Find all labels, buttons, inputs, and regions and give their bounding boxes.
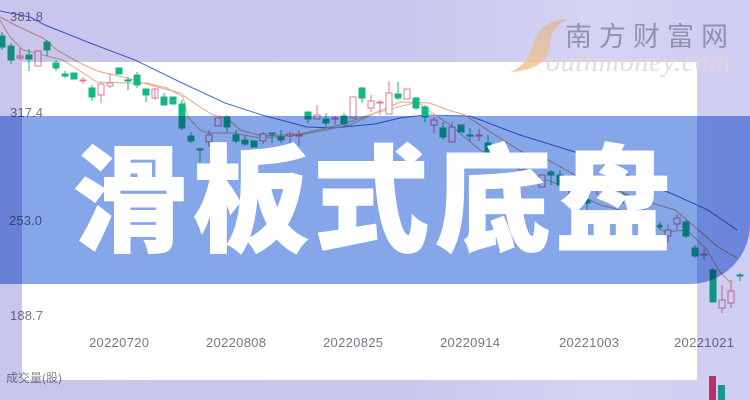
axis labels: dates: 20221021 xyxy=(674,335,734,350)
axis labels: dates: 20220720 xyxy=(89,335,149,350)
candlesticks: rising (pink hollow) xyxy=(17,48,734,313)
blue title band xyxy=(0,116,750,284)
logo: south money swoosh xyxy=(510,19,569,72)
title: 滑板式底盘 xyxy=(72,108,671,276)
candlesticks: falling (green) xyxy=(0,32,743,302)
volume bar: rising xyxy=(709,376,716,400)
line: medium moving average xyxy=(0,17,737,258)
line: long moving average xyxy=(0,11,737,230)
volume axis label: 成交量(股) xyxy=(6,370,62,385)
logo: chinese site name: 南方财富网 xyxy=(565,15,728,54)
axis labels: dates: 20221003 xyxy=(559,335,619,350)
volume bars xyxy=(709,376,725,400)
axis labels: dates: 20220825 xyxy=(323,335,383,350)
axis labels: price: 188.7 xyxy=(10,308,43,323)
axis labels: dates xyxy=(89,335,734,350)
line: short moving average xyxy=(0,20,730,282)
axis labels: dates: 20220914 xyxy=(440,335,500,350)
axis labels: price: 253.0 xyxy=(9,213,42,228)
axis labels: price: 317.4 xyxy=(10,105,43,120)
axis labels: price xyxy=(9,9,43,323)
volume bar: falling xyxy=(718,385,725,400)
logo: southmoney.com: outhmoney.com xyxy=(546,47,730,78)
axis labels: price: 381.8 xyxy=(10,9,43,24)
moving average lines xyxy=(0,11,737,282)
axis labels: dates: 20220808 xyxy=(206,335,266,350)
